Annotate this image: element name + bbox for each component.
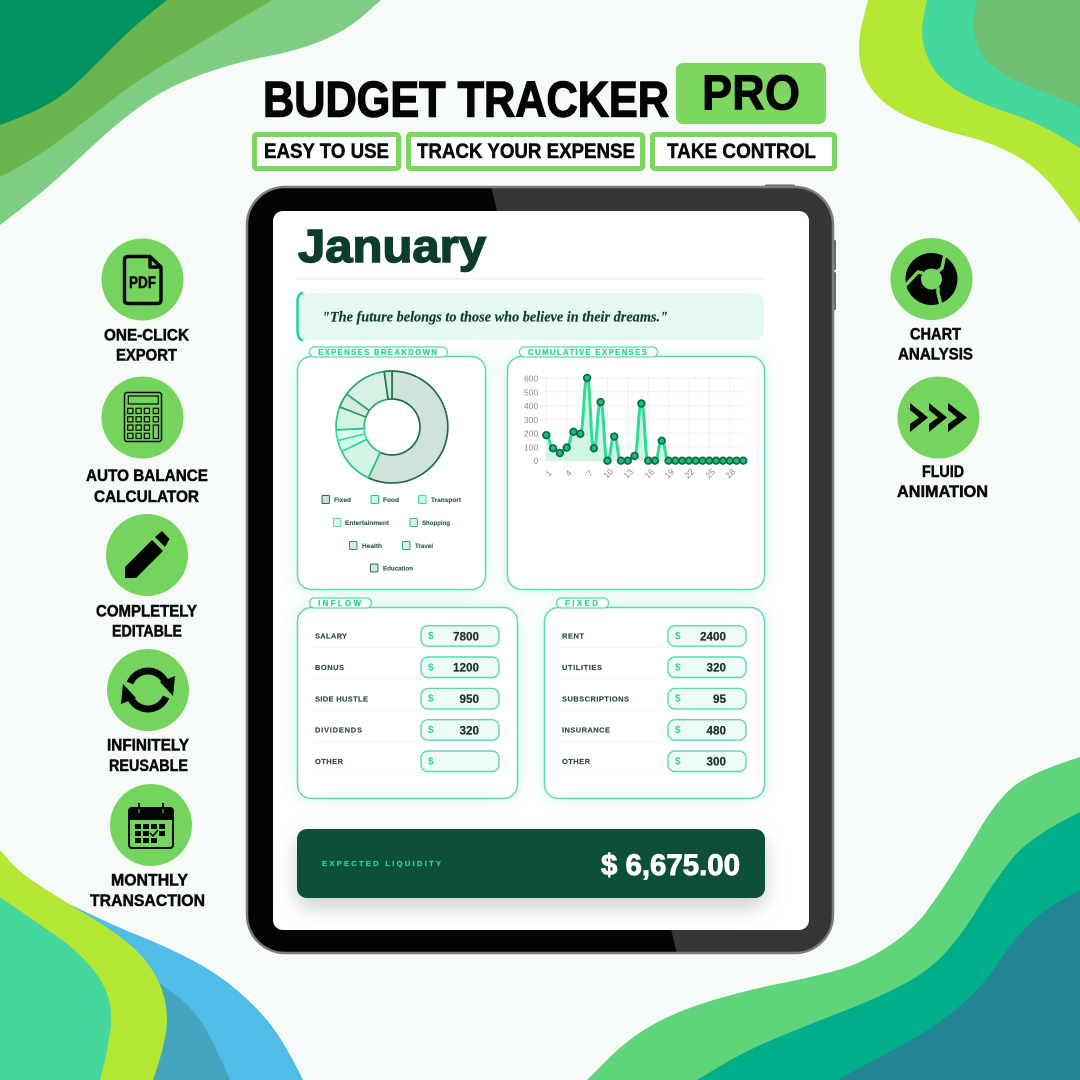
panel: fixed: INSURANCE xyxy=(562,726,610,735)
line chart: 7 xyxy=(584,468,595,478)
panel: fixed: 2400 xyxy=(700,630,726,643)
quote banner: "The future belongs to those who believe in their dreams." xyxy=(322,310,668,326)
panel: fixed: 320 xyxy=(706,662,726,675)
panel tag: cumulative expenses: CUMULATIVE EXPENSES xyxy=(528,348,648,357)
donut legend xyxy=(322,496,461,572)
feature: fluid animation xyxy=(897,376,988,501)
panel: inflow: $ xyxy=(428,694,434,705)
panel: cumulative expenses xyxy=(508,347,764,590)
panel: inflow: 320 xyxy=(459,724,479,737)
panel tag: inflow: INFLOW xyxy=(318,599,361,608)
panel: inflow: DIVIDENDS xyxy=(315,726,362,735)
panel tag: fixed: FIXED xyxy=(565,599,598,608)
feature: completely editable: EDITABLE xyxy=(112,623,182,641)
background waves: bottom right xyxy=(587,757,1080,1080)
tablet frame xyxy=(247,184,836,954)
line chart: 1 xyxy=(543,468,554,478)
line chart: 100 xyxy=(524,442,538,452)
feature: infinitely reusable: REUSABLE xyxy=(109,757,188,775)
panel: fixed: $ xyxy=(675,725,681,736)
feature: completely editable xyxy=(96,514,197,641)
tag: easy to use: EASY TO USE xyxy=(264,140,389,163)
panel: inflow xyxy=(298,598,518,798)
panel: fixed: $ xyxy=(675,662,681,673)
badge: PRO: PRO xyxy=(702,66,800,120)
line chart: 0 xyxy=(534,456,538,466)
feature: chart analysis: CHART xyxy=(910,325,961,343)
panel tag: inflow xyxy=(310,598,372,608)
tag: track your expense xyxy=(408,134,642,168)
line chart: 19 xyxy=(662,466,676,480)
panel tag: expenses breakdown: EXPENSES BREAKDOWN xyxy=(318,348,437,357)
panel: fixed: $ xyxy=(675,631,681,642)
feature: infinitely reusable xyxy=(107,649,189,775)
background waves: top right xyxy=(859,0,1080,223)
panel: inflow: $ xyxy=(428,631,434,642)
panel: expected liquidity xyxy=(297,829,765,898)
line chart: 500 xyxy=(524,387,538,397)
feature: completely editable: COMPLETELY xyxy=(96,603,197,621)
line chart: 10 xyxy=(601,466,615,480)
background waves: top left xyxy=(0,0,381,225)
feature: auto balance calculator: CALCULATOR xyxy=(94,488,199,506)
line chart: 200 xyxy=(524,429,538,439)
panel: inflow: SIDE HUSTLE xyxy=(315,694,368,703)
title: BUDGET TRACKER xyxy=(263,72,669,128)
line chart: 400 xyxy=(524,401,538,411)
tag: take control xyxy=(652,134,834,168)
panel: inflow: 7800 xyxy=(453,630,479,643)
panel: inflow: OTHER xyxy=(315,757,344,766)
line chart: 600 xyxy=(524,374,538,384)
panel: fixed: 300 xyxy=(706,756,726,769)
feature: fluid animation: ANIMATION xyxy=(897,483,988,501)
donut legend: Education xyxy=(383,566,413,572)
feature: auto balance calculator xyxy=(86,376,208,506)
donut chart xyxy=(336,371,448,483)
panel: inflow: $ xyxy=(428,662,434,673)
panel: inflow: 950 xyxy=(459,693,479,706)
panel: fixed: SUBSCRIPTIONS xyxy=(562,694,629,703)
donut legend: Fixed xyxy=(334,498,351,504)
donut legend: Transport xyxy=(431,498,461,504)
panel: inflow: $ xyxy=(428,756,434,767)
month heading: January xyxy=(298,220,486,272)
line chart: 4 xyxy=(563,468,574,478)
feature: one-click export xyxy=(102,238,189,365)
line chart: 25 xyxy=(703,466,717,480)
tag: track your expense: TRACK YOUR EXPENSE xyxy=(417,140,635,163)
feature: auto balance calculator: AUTO BALANCE xyxy=(86,467,208,485)
feature: infinitely reusable: INFINITELY xyxy=(107,737,189,755)
badge: PRO xyxy=(676,63,826,124)
panel: fixed: 95 xyxy=(713,693,726,706)
donut legend: Shopping xyxy=(422,521,450,527)
panel: inflow: $ xyxy=(428,725,434,736)
donut legend: Health xyxy=(362,544,382,550)
feature: chart analysis: ANALYSIS xyxy=(898,345,973,363)
feature: fluid animation: FLUID xyxy=(922,463,964,481)
line chart: 28 xyxy=(723,466,737,480)
feature: monthly transaction: TRANSACTION xyxy=(90,892,205,910)
background waves: bottom left xyxy=(0,850,303,1080)
feature: one-click export: ONE-CLICK xyxy=(104,327,189,345)
panel: inflow: 1200 xyxy=(453,662,479,675)
line chart xyxy=(524,374,747,480)
panel: fixed: 480 xyxy=(706,724,726,737)
panel: expected liquidity: $ 6,675.00 xyxy=(601,849,740,882)
panel: fixed: OTHER xyxy=(562,757,591,766)
panel: inflow: SALARY xyxy=(315,632,347,641)
donut legend: Food xyxy=(383,498,399,504)
panel: inflow: BONUS xyxy=(315,663,344,672)
line chart: 300 xyxy=(524,415,538,425)
feature: monthly transaction xyxy=(90,784,205,910)
line chart: 13 xyxy=(621,466,635,480)
feature: monthly transaction: MONTHLY xyxy=(111,872,188,890)
donut legend: Travel xyxy=(415,544,433,550)
feature: chart analysis xyxy=(890,238,973,363)
panel: fixed: $ xyxy=(675,756,681,767)
panel: fixed: RENT xyxy=(562,632,584,641)
line chart: 16 xyxy=(642,466,656,480)
panel: fixed: $ xyxy=(675,694,681,705)
donut legend: Entertainment xyxy=(345,521,389,527)
panel tag: fixed xyxy=(556,598,608,608)
panel: expenses breakdown xyxy=(298,347,486,590)
line chart: 22 xyxy=(682,466,696,480)
tag: easy to use xyxy=(254,134,398,168)
panel: fixed: UTILITIES xyxy=(562,663,602,672)
feature: one-click export: PDF xyxy=(129,273,156,292)
quote banner xyxy=(297,293,764,340)
panel: fixed xyxy=(544,598,764,798)
panel: expected liquidity: EXPECTED LIQUIDITY xyxy=(322,859,441,868)
tag: take control: TAKE CONTROL xyxy=(667,140,816,163)
feature: one-click export: EXPORT xyxy=(116,347,177,365)
